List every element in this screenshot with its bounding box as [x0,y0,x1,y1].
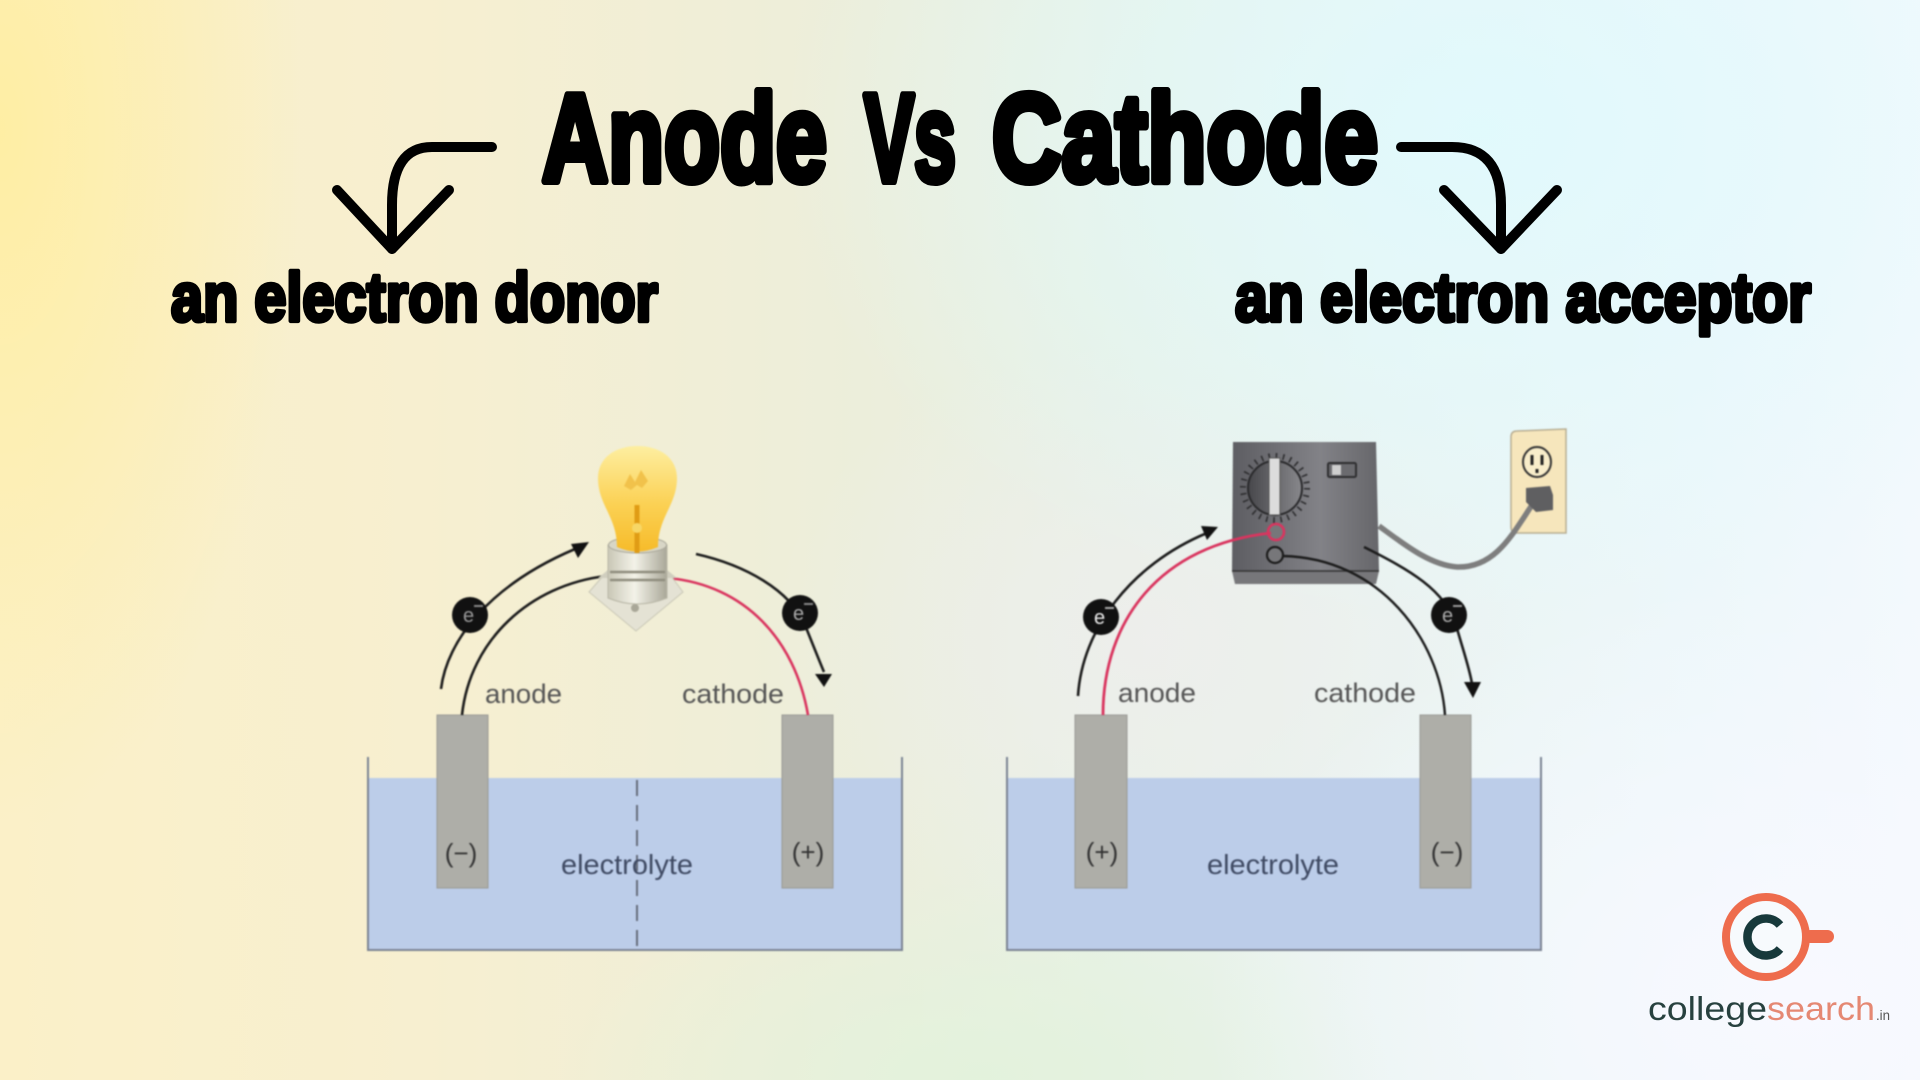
arrow: electron flow from box [1364,547,1481,698]
wall plug [1526,486,1553,512]
title [542,70,1378,208]
wordmark: search [1767,990,1875,1027]
electrolyte tank [1007,757,1541,950]
panel: galvanic cell (left diagram) [368,446,902,950]
subtitle: an electron donor: an electron donor [171,259,658,336]
electron badge right: e [793,603,804,625]
label: electrolyte: electrolyte [1207,849,1339,880]
title: Cathode [992,70,1378,208]
panel: electrolytic cell (right diagram) [1007,429,1566,950]
title: Anode [542,70,827,208]
electrolyte tank [368,757,902,950]
electrode: anode [437,715,488,888]
electron badge left: e [463,605,474,627]
arrow: anode to donor label [337,147,492,249]
logo: collegesearch.in [1648,897,1890,1027]
subtitle: an electron acceptor: an electron acceptor [1235,259,1811,336]
electron badge left [1083,599,1119,635]
sign: positive: (+) [792,837,824,867]
sign: positive: (+) [1086,837,1118,867]
label: electrolyte: electrolyte [561,849,693,880]
electron badge left [452,597,488,633]
electron badge right [782,595,818,631]
wire: black to bulb [462,576,606,715]
title: Vs [864,70,956,208]
wire: black from box [1283,556,1445,715]
wordmark: .in [1876,1007,1890,1023]
sign: negative: (−) [1431,837,1463,867]
label: anode: anode [485,679,562,709]
arrow: electron flow to box [1078,526,1218,696]
label: cathode: cathode [682,679,784,709]
arrow: electron flow to bulb [441,542,589,689]
electrode: anode [1075,715,1127,888]
wordmark: college [1648,990,1767,1027]
electron badge right: e [1442,605,1453,627]
sign: negative: (−) [445,838,477,868]
icon: magnifier C mark [1726,897,1834,977]
label: anode: anode [1118,678,1196,708]
power supply box [1232,442,1379,584]
electron badge right [1431,597,1467,633]
electrode: cathode [782,715,833,888]
electrode: cathode [1420,715,1471,888]
wall outlet with plug [1511,429,1566,533]
electron badge left: e [1094,607,1105,629]
arrow: electron flow from bulb [696,554,832,687]
arrow: cathode to acceptor label [1401,147,1557,249]
label: cathode: cathode [1314,678,1416,708]
light bulb [589,446,683,631]
power cord [1379,505,1532,567]
wire: red to box [1103,533,1271,715]
wire: red from bulb [668,578,808,715]
